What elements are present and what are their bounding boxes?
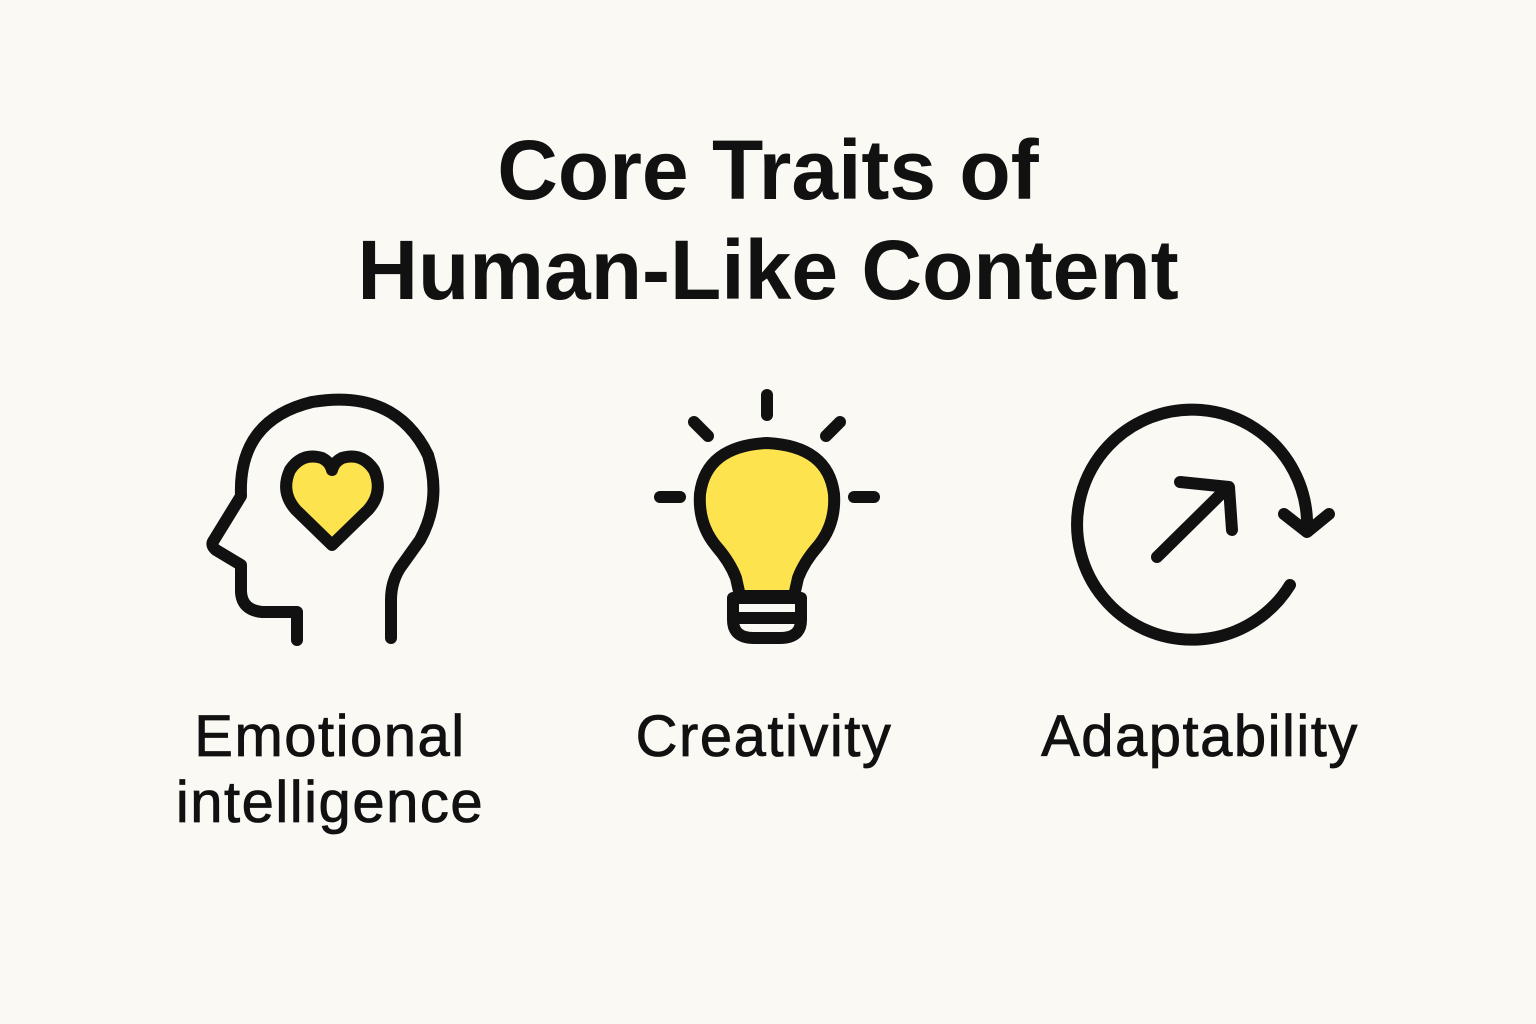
label: emotional intelligence: Emotional — [194, 704, 466, 769]
title — [357, 123, 1179, 317]
title: Human-Like Content — [357, 223, 1179, 317]
label: adaptability: Adaptability — [1041, 704, 1359, 769]
icon: light bulb — [660, 395, 874, 638]
title: Core Traits of — [497, 123, 1039, 217]
icon: circular arrow — [1077, 410, 1329, 640]
label: creativity: Creativity — [636, 704, 892, 769]
icon: head with heart — [212, 400, 433, 640]
label: emotional intelligence — [176, 704, 484, 835]
label: emotional intelligence: intelligence — [176, 770, 484, 835]
